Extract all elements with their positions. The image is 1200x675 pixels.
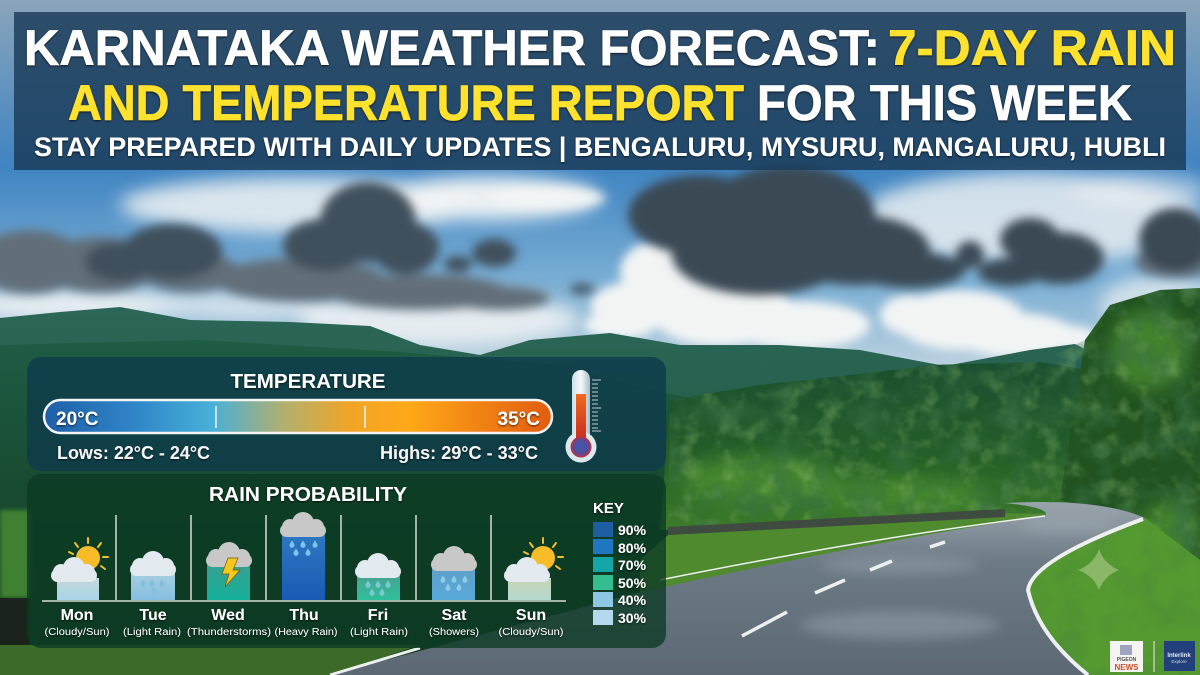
Tuesday bar and icon: [130, 551, 176, 600]
day labels: [44, 607, 564, 638]
Wednesday bar and icon: [206, 542, 252, 600]
foliage mottling: [668, 288, 1200, 560]
day labels: (Light Rain): [350, 627, 408, 638]
bottom-left grass: [0, 645, 420, 675]
white clouds: [0, 172, 1200, 357]
day labels: (Cloudy/Sun): [498, 627, 564, 638]
heading: rain probability: RAIN PROBABILITY: [209, 484, 408, 506]
day labels: (Heavy Rain): [274, 627, 338, 638]
subtitle: STAY PREPARED WITH DAILY UPDATES | BENGALURU, MYSURU, MANGALURU, HUBLI: [34, 132, 1166, 162]
legend: rain key: [593, 500, 647, 626]
legend: rain key: 80%: [618, 540, 647, 556]
logo: Pigeon News: [1110, 641, 1143, 672]
legend: rain key: 50%: [618, 575, 647, 591]
mid forest: [660, 362, 1100, 530]
Sunday bar and icon: [504, 538, 563, 600]
road: [330, 502, 1145, 675]
column dividers and baseline: [42, 515, 566, 601]
logo: Pigeon News: NEWS: [1114, 663, 1139, 672]
logo: Interlink Explore: Interlink: [1167, 653, 1191, 659]
legend: rain key: 30%: [618, 610, 647, 626]
right grass: [1028, 518, 1200, 675]
lows label: Lows: 22°C - 24°C: [57, 443, 210, 463]
day labels: Thu: [289, 607, 319, 624]
icon: thermometer: [566, 370, 601, 462]
distant hills: [0, 307, 1110, 520]
Friday bar and icon: [355, 553, 401, 600]
day labels: Wed: [211, 607, 245, 624]
heading: temperature: TEMPERATURE: [230, 371, 386, 393]
dark clouds: [0, 165, 1200, 310]
panel: rain probability: [27, 474, 666, 648]
panel: temperature: [27, 357, 666, 471]
logo: Pigeon News: PIGEON: [1117, 657, 1137, 663]
Monday bar and icon: [51, 538, 108, 600]
left trees edge: [0, 510, 30, 598]
icon: faint sparkle watermark: [1078, 549, 1119, 590]
headline line 1: 7-DAY RAIN: [888, 20, 1176, 76]
road markings: [330, 516, 1143, 675]
highs label: Highs: 29°C - 33°C: [380, 443, 538, 463]
brighter foliage patches: [680, 310, 1200, 560]
day labels: (Thunderstorms): [187, 627, 271, 638]
temperature gradient bar: 20°C: [56, 409, 99, 430]
headline line 1: KARNATAKA WEATHER FORECAST:: [24, 20, 880, 76]
day labels: Fri: [368, 607, 388, 624]
headline line 2: FOR THIS WEEK: [757, 75, 1132, 131]
roadside grass left: [640, 513, 1050, 592]
legend: rain key: 40%: [618, 592, 647, 608]
Saturday bar and icon: [431, 546, 477, 600]
guardrail: [668, 513, 1005, 531]
day labels: Mon: [61, 607, 93, 624]
legend: rain key: 70%: [618, 557, 647, 573]
right tall trees: [1060, 288, 1200, 600]
day labels: (Showers): [429, 627, 479, 638]
temperature gradient bar: 35°C: [498, 409, 540, 430]
day labels: (Light Rain): [123, 627, 181, 638]
divider between logos: [1153, 641, 1155, 672]
legend: rain key: 90%: [618, 522, 647, 538]
Thursday bar and icon: [280, 512, 326, 600]
day labels: Tue: [139, 607, 167, 624]
logo: Interlink Explore: [1164, 641, 1195, 671]
headline line 2: AND TEMPERATURE REPORT: [68, 75, 744, 131]
logo: Interlink Explore: Explore: [1171, 659, 1187, 664]
temperature gradient bar: [44, 400, 552, 433]
day labels: Sat: [442, 607, 467, 624]
day labels: Sun: [516, 607, 546, 624]
day labels: (Cloudy/Sun): [44, 627, 110, 638]
legend: rain key: KEY: [593, 500, 624, 517]
title banner: [14, 12, 1186, 170]
